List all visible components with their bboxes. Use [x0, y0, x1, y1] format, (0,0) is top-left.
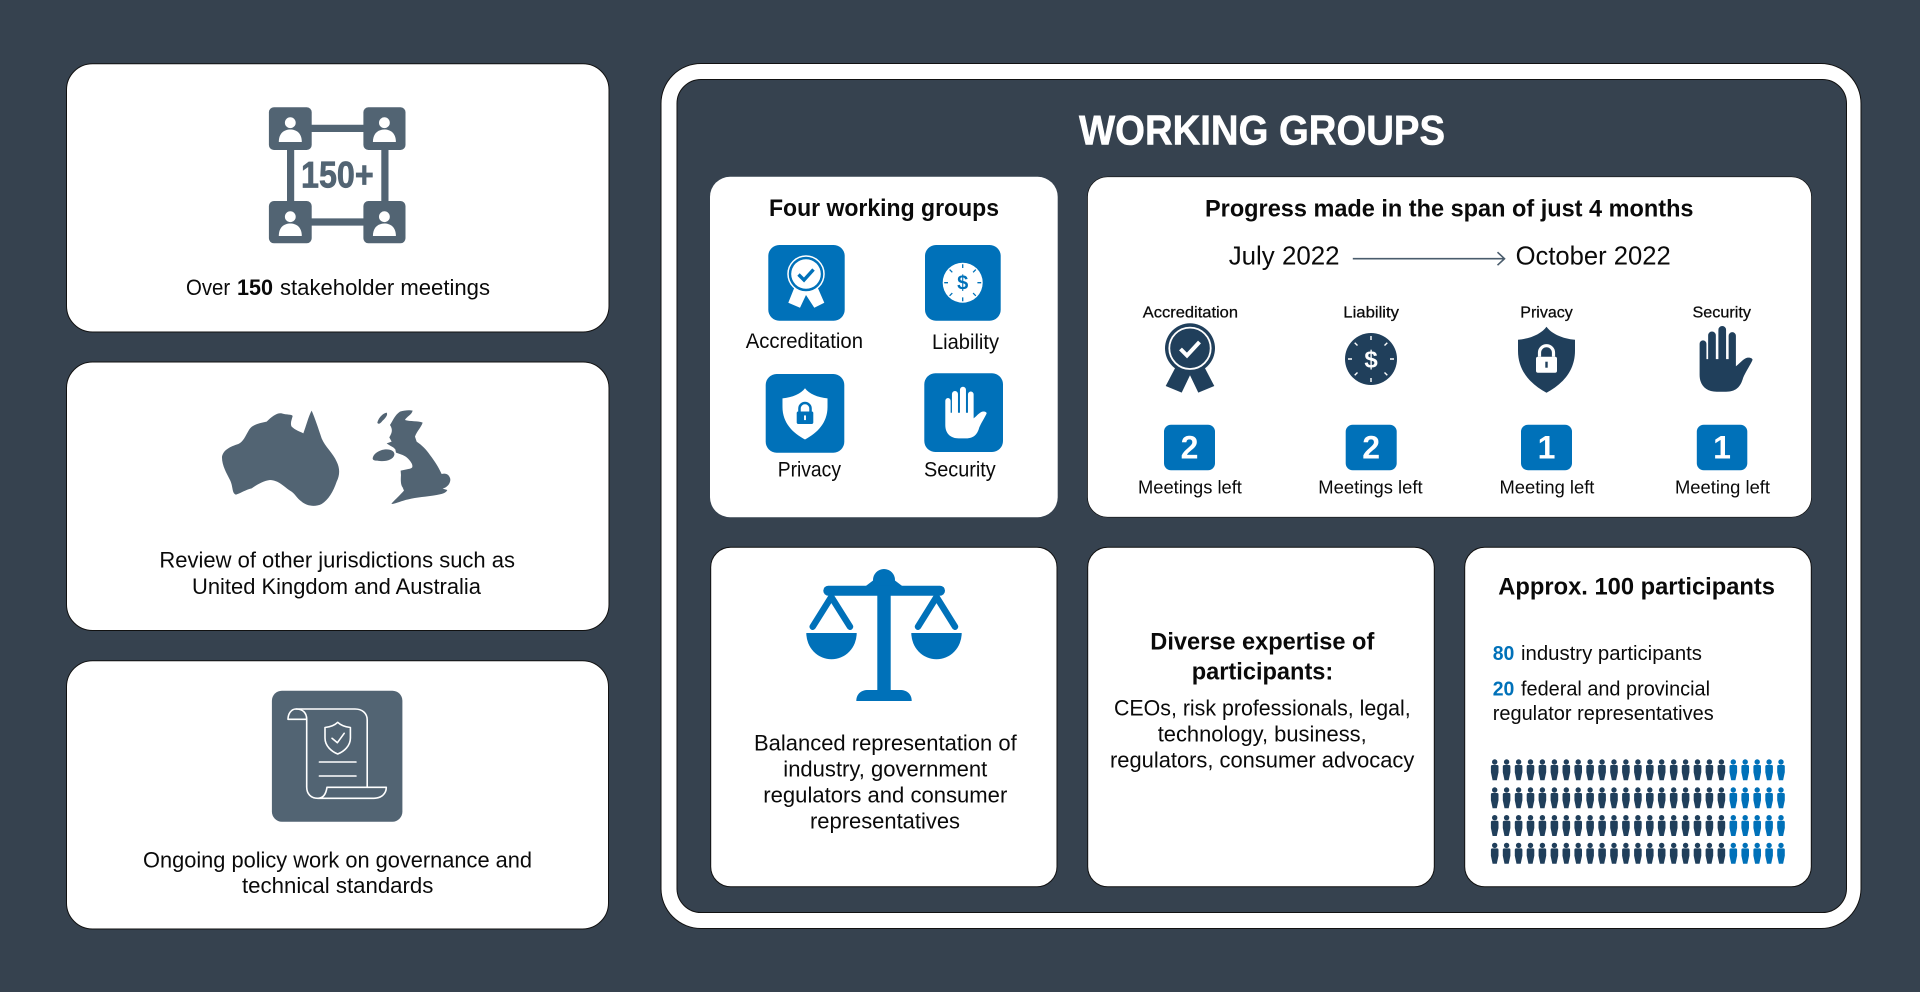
- column: security progress: Meeting left: [1675, 476, 1770, 497]
- icon: dark accreditation badge: [1165, 323, 1215, 393]
- column: liability progress: [1318, 305, 1423, 497]
- text: participant backgrounds: [1110, 696, 1414, 773]
- column: accreditation progress: Meetings left: [1138, 476, 1242, 497]
- text: ongoing policy work: Ongoing policy work on governance and: [143, 847, 532, 872]
- icon: security hand: [924, 373, 1003, 452]
- number box: 2: 2: [1181, 430, 1198, 466]
- text: 20 regulator representatives: [1493, 679, 1714, 725]
- panel: four working groups: [710, 177, 1058, 517]
- column: privacy progress: Meeting left: [1500, 476, 1594, 497]
- panel: progress: [1088, 177, 1812, 517]
- icon: dark liability clock: [1345, 333, 1397, 385]
- text: 20 regulator representatives: 20: [1493, 679, 1514, 701]
- icon: privacy shield: [766, 374, 844, 453]
- text: over 150 stakeholder meetings: stakeholder meetings: [280, 275, 490, 300]
- title: WORKING GROUPS: [1079, 106, 1445, 154]
- text: 20 regulator representatives: federal and provincial: [1521, 679, 1710, 701]
- text: ongoing policy work: technical standards: [242, 873, 433, 898]
- panel: working groups: [661, 64, 1861, 928]
- text: over 150 stakeholder meetings: Over: [186, 275, 230, 300]
- panel: diverse expertise: [1088, 547, 1434, 887]
- text: balanced representation: regulators and consumer: [763, 783, 1007, 808]
- icon: accreditation badge: [768, 245, 845, 321]
- panel: balanced representation: [711, 547, 1057, 887]
- text: over 150 stakeholder meetings: 150: [237, 275, 273, 300]
- text: participant backgrounds: CEOs, risk professionals, legal,: [1114, 696, 1411, 721]
- icon: policy scroll with shield: [272, 691, 402, 822]
- number box: 1: 1: [1538, 430, 1555, 466]
- number box: 2: [1346, 425, 1397, 470]
- column: security progress: [1675, 305, 1770, 497]
- heading: diverse expertise: Diverse expertise of: [1150, 628, 1375, 655]
- label: liability: Liability: [932, 331, 999, 354]
- text: review of other jurisdictions: Review of other jurisdictions such as: [159, 548, 515, 573]
- label: accreditation: Accreditation: [746, 330, 863, 353]
- text: review of other jurisdictions: United Kingdom and Australia: [192, 574, 482, 599]
- icon: maps of Australia and United Kingdom: [222, 410, 450, 506]
- label: security: Security: [924, 459, 996, 482]
- text: 20 regulator representatives: regulator representatives: [1493, 703, 1714, 725]
- text: over 150 stakeholder meetings: [186, 275, 490, 300]
- number box: 1: [1697, 425, 1747, 470]
- icon: liability clock: [925, 245, 1001, 321]
- text: balanced representation: [754, 731, 1018, 834]
- heading: diverse expertise: [1150, 628, 1375, 685]
- panel: stakeholder meetings: [66, 64, 609, 332]
- icon: dark security hand: [1700, 326, 1753, 392]
- heading: diverse expertise: participants:: [1192, 658, 1333, 685]
- arrow: july to october: [1353, 252, 1504, 265]
- number box: 2: [1164, 425, 1215, 470]
- panel: other jurisdictions: [66, 362, 609, 630]
- icon: dark privacy shield: [1518, 327, 1575, 393]
- column: privacy progress: [1500, 305, 1594, 497]
- icon: 150+ network of people: 150+: [301, 154, 374, 195]
- label: privacy: Privacy: [778, 459, 841, 482]
- text: july 2022: July 2022: [1229, 240, 1340, 270]
- heading: approx. 100 participants: Approx. 100 participants: [1498, 573, 1775, 600]
- column: liability progress: Liability: [1343, 305, 1399, 322]
- number box: 1: [1521, 425, 1572, 470]
- text: 80 industry participants: industry participants: [1521, 643, 1702, 665]
- column: privacy progress: Privacy: [1520, 305, 1573, 322]
- text: participant backgrounds: regulators, consumer advocacy: [1110, 748, 1414, 773]
- panel: ongoing policy work: [66, 661, 608, 929]
- column: liability progress: Meetings left: [1318, 476, 1423, 497]
- text: participant backgrounds: technology, business,: [1158, 722, 1367, 747]
- text: 80 industry participants: 80: [1493, 643, 1514, 665]
- column: accreditation progress: [1138, 305, 1242, 497]
- column: accreditation progress: Accreditation: [1143, 305, 1238, 322]
- column: security progress: Security: [1692, 305, 1751, 322]
- icon: dark liability clock: $: [1364, 346, 1378, 374]
- pictogram: 100 people, 80 dark and 20 blue: [1491, 759, 1785, 864]
- text: october 2022: October 2022: [1516, 240, 1671, 270]
- text: balanced representation: industry, government: [783, 757, 987, 782]
- heading: progress: Progress made in the span of just 4 months: [1205, 196, 1694, 223]
- icon: liability clock: $: [957, 273, 968, 295]
- icon: 150+ network of people: [269, 107, 406, 243]
- icon: balance scale: [806, 569, 962, 701]
- text: ongoing policy work: [143, 847, 532, 898]
- text: review of other jurisdictions: [159, 548, 515, 599]
- number box: 1: 1: [1713, 430, 1731, 466]
- panel: approx. 100 participants: [1465, 547, 1811, 887]
- text: balanced representation: Balanced representation of: [754, 731, 1018, 756]
- text: balanced representation: representatives: [810, 809, 960, 834]
- heading: four working groups: Four working groups: [769, 195, 999, 222]
- number box: 2: 2: [1362, 430, 1380, 466]
